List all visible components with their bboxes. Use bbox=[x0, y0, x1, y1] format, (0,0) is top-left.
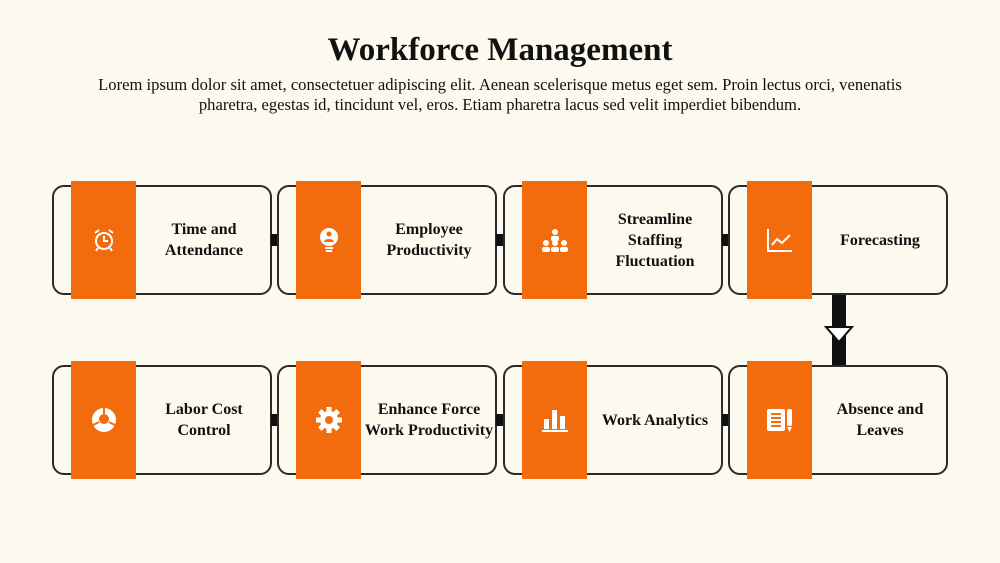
icon: line chart bbox=[747, 181, 812, 299]
card: Labor Cost Control: Control bbox=[177, 422, 231, 439]
card: Time and Attendance bbox=[52, 181, 272, 299]
card: Forecasting: Forecasting bbox=[840, 232, 920, 248]
connector bbox=[496, 234, 504, 246]
connector bbox=[271, 414, 279, 426]
title: Workforce Management bbox=[328, 32, 672, 68]
card: Labor Cost Control: Labor Cost bbox=[165, 401, 243, 418]
description bbox=[98, 75, 902, 114]
card: Streamline Staffing Fluctuation: Staffing bbox=[628, 232, 682, 248]
icon: document with pen bbox=[747, 361, 812, 479]
card: Employee Productivity: Employee bbox=[395, 221, 463, 238]
card: Time and Attendance: Time and bbox=[171, 221, 237, 238]
card: Absence and Leaves: Leaves bbox=[856, 422, 904, 439]
connector bbox=[496, 414, 504, 426]
arrow: down bbox=[824, 295, 854, 365]
card: Enhance Force Work Productivity: Work Productivity bbox=[365, 422, 493, 439]
card: Streamline Staffing Fluctuation bbox=[503, 181, 723, 299]
card: Enhance Force Work Productivity bbox=[277, 361, 497, 479]
connector bbox=[271, 234, 279, 246]
card: Work Analytics bbox=[503, 361, 723, 479]
connector bbox=[722, 414, 730, 426]
connector bbox=[722, 234, 730, 246]
icon: bar chart bbox=[522, 361, 587, 479]
icon: cost pie bbox=[71, 361, 136, 479]
card: Employee Productivity bbox=[277, 181, 497, 299]
card: Enhance Force Work Productivity: Enhance Force bbox=[378, 401, 480, 418]
card: Time and Attendance: Attendance bbox=[165, 242, 243, 259]
description: pharetra, egestas id, tincidunt vel, eros. Etiam pharetra lacus sed velit imperdiet bibendum. bbox=[199, 95, 801, 114]
icon: alarm clock bbox=[71, 181, 136, 299]
card: Forecasting bbox=[728, 181, 948, 299]
card: Absence and Leaves: Absence and bbox=[837, 401, 923, 418]
icon: gear bbox=[296, 361, 361, 479]
card: Employee Productivity: Productivity bbox=[386, 242, 472, 259]
card: Absence and Leaves bbox=[728, 361, 948, 479]
card: Work Analytics: Work Analytics bbox=[602, 412, 708, 428]
card: Labor Cost Control bbox=[52, 361, 272, 479]
card: Streamline Staffing Fluctuation: Fluctuation bbox=[615, 252, 695, 270]
card: Streamline Staffing Fluctuation: Streamline bbox=[618, 210, 692, 228]
icon: bulb bbox=[296, 181, 361, 299]
description: Lorem ipsum dolor sit amet, consectetuer adipiscing elit. Aenean scelerisque metus eget sem. Proin lectus orci, venenatis bbox=[98, 75, 902, 94]
icon: hierarchy bbox=[522, 181, 587, 299]
